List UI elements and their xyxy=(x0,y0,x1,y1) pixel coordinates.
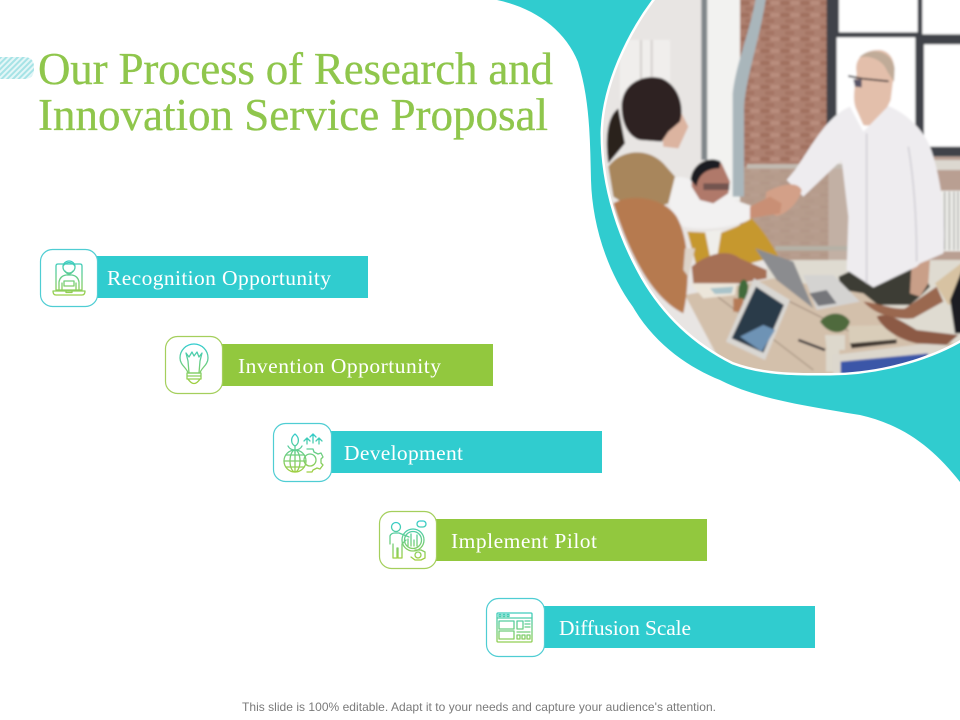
step 5: diffusion scale xyxy=(486,598,815,656)
label 3: Development xyxy=(344,441,463,465)
teal background blob xyxy=(497,0,960,482)
title: Innovation Service Proposal xyxy=(38,90,548,140)
table xyxy=(684,278,954,373)
bar 3 xyxy=(331,431,602,473)
man xyxy=(838,268,931,307)
photo: team handshake at meeting xyxy=(593,0,960,387)
title accent hatch xyxy=(0,57,34,79)
label 5: Diffusion Scale xyxy=(559,616,691,640)
seated man xyxy=(692,161,730,203)
icon box 4 xyxy=(380,512,436,568)
bar 2 xyxy=(222,344,493,386)
icon box 3 xyxy=(274,424,332,482)
footer note: This slide is 100% editable. Adapt it to your needs and capture your audience's attention. xyxy=(242,700,716,714)
icon box 1 xyxy=(40,250,98,306)
icon: person on laptop xyxy=(53,261,85,295)
label 2: Invention Opportunity xyxy=(238,354,441,378)
icon box 5 xyxy=(486,598,544,656)
bar 5 xyxy=(544,606,815,648)
pot plant xyxy=(820,314,850,332)
label 1: Recognition Opportunity xyxy=(107,266,331,290)
title: Our Process of Research and xyxy=(38,44,553,94)
woman xyxy=(766,184,802,216)
label 4: Implement Pilot xyxy=(451,529,597,553)
step 2: invention opportunity xyxy=(166,336,493,394)
photo edge ring xyxy=(603,0,960,373)
bar 1 xyxy=(97,256,368,298)
icon: analyst with magnifier and chart xyxy=(390,521,426,560)
bottom laptop xyxy=(833,342,948,373)
tablet xyxy=(726,278,790,360)
step 4: implement pilot xyxy=(380,512,707,568)
plant on table xyxy=(738,280,748,300)
icon: globe, plant and gear xyxy=(284,434,323,472)
bar 4 xyxy=(436,519,707,561)
icon: web layout window xyxy=(497,613,532,642)
step 3: development xyxy=(274,424,602,482)
icon: light bulb xyxy=(180,344,208,384)
title xyxy=(38,44,553,140)
blonde foreground xyxy=(613,198,688,313)
icon box 2 xyxy=(166,336,222,394)
step 1: recognition opportunity xyxy=(40,250,368,306)
laptop xyxy=(755,248,813,308)
right hands xyxy=(863,287,943,319)
